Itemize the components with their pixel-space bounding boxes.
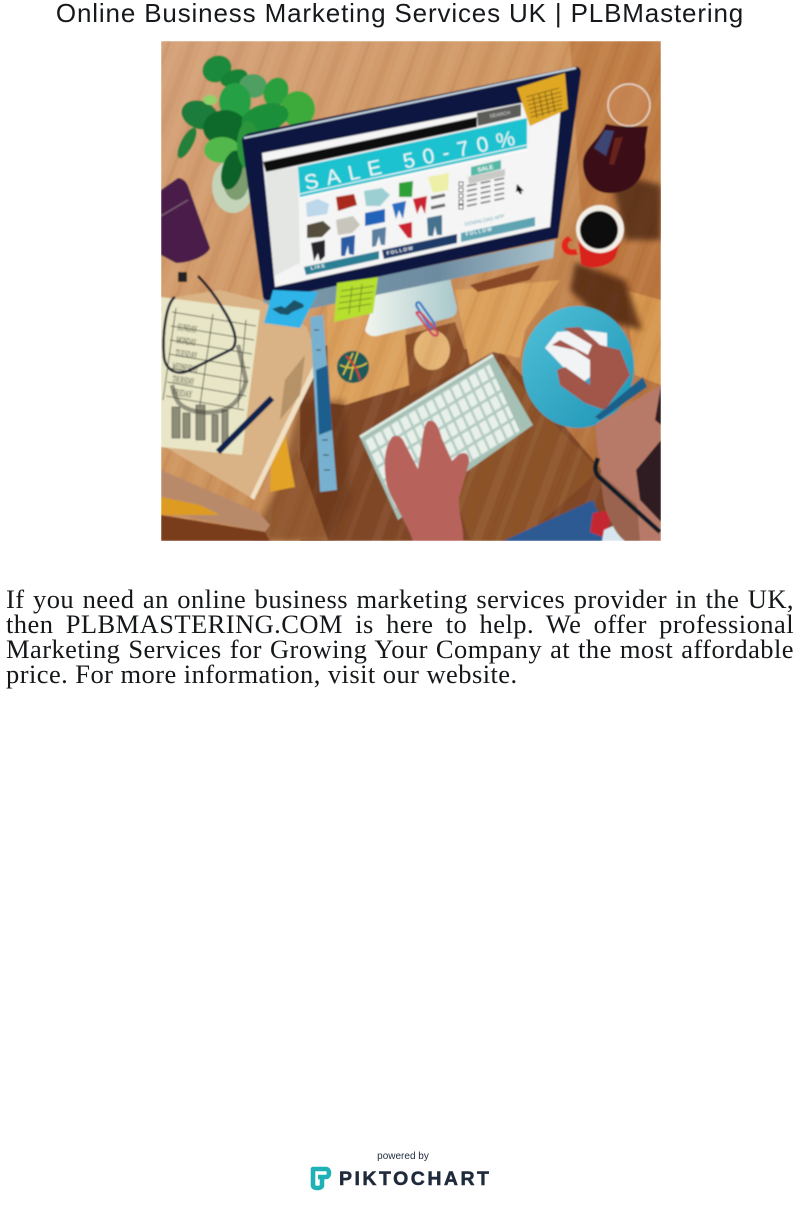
yellow sticky note xyxy=(517,73,568,126)
icon: piktochart mark xyxy=(313,1169,329,1188)
weekday labels on note: TUESDAY xyxy=(175,348,198,362)
icon: eyeglasses xyxy=(163,276,246,413)
icon: red coffee cup xyxy=(562,205,624,267)
weekday labels on note: SUNDAY xyxy=(177,322,198,336)
wordmark: PIKTOCHART xyxy=(339,1168,491,1190)
paper clips xyxy=(416,302,438,336)
icon: purple wallet xyxy=(161,178,210,263)
icon: binder clip xyxy=(178,272,187,282)
powered by: powered by xyxy=(377,1151,429,1162)
body text: price. For more information, visit our website. xyxy=(6,659,518,689)
weekday labels on note: THURSDAY xyxy=(172,374,195,388)
sale side list xyxy=(459,160,524,209)
chart sketch on note xyxy=(172,405,228,443)
blue sticky note xyxy=(264,290,318,328)
screen xyxy=(262,95,562,287)
search label: SEARCH xyxy=(489,110,511,120)
person at desk xyxy=(503,377,661,541)
body text: Marketing Services for Growing Your Company at the most affordable xyxy=(6,634,794,664)
weekday labels on note: FRIDAY xyxy=(172,387,193,401)
monitor stand xyxy=(365,278,457,336)
screen buttons xyxy=(304,214,535,275)
sale banner xyxy=(298,118,527,198)
screen buttons: FOLLOW xyxy=(386,245,414,257)
hand on keyboard xyxy=(385,421,469,541)
mouse pad xyxy=(522,306,634,428)
clothing grid xyxy=(306,173,449,261)
weekday labels on note xyxy=(172,322,199,401)
weekday labels on note: MONDAY xyxy=(176,335,197,349)
keyboard xyxy=(360,355,533,520)
screen buttons: FOLLOW xyxy=(465,226,493,238)
icon: pencil xyxy=(218,398,272,452)
icon: rubber band ball xyxy=(337,351,369,383)
panel: monitor xyxy=(242,67,581,316)
green sticky note xyxy=(334,277,378,322)
screen buttons: DOWNLOAD APP xyxy=(464,214,506,228)
body text: If you need an online business marketing services provider in the UK, xyxy=(6,584,794,614)
sale side list: SALE xyxy=(477,165,494,174)
icon: potted plant xyxy=(174,50,315,213)
folder stack: WEDNESDAY xyxy=(172,361,199,376)
sale text: SALE 50-70% xyxy=(302,125,525,195)
ruler xyxy=(310,315,337,492)
wood desk surface xyxy=(161,41,661,541)
icon: carafe xyxy=(583,84,650,193)
photo: marketing desk with monitor xyxy=(161,41,661,541)
body text: then PLBMASTERING.COM is here to help. We offer professional xyxy=(6,609,794,639)
piktochart logo xyxy=(310,1151,491,1190)
body text xyxy=(6,584,794,689)
screen buttons: LIKE xyxy=(310,263,326,272)
folder stack xyxy=(161,290,322,541)
hand on mouse xyxy=(545,327,630,410)
